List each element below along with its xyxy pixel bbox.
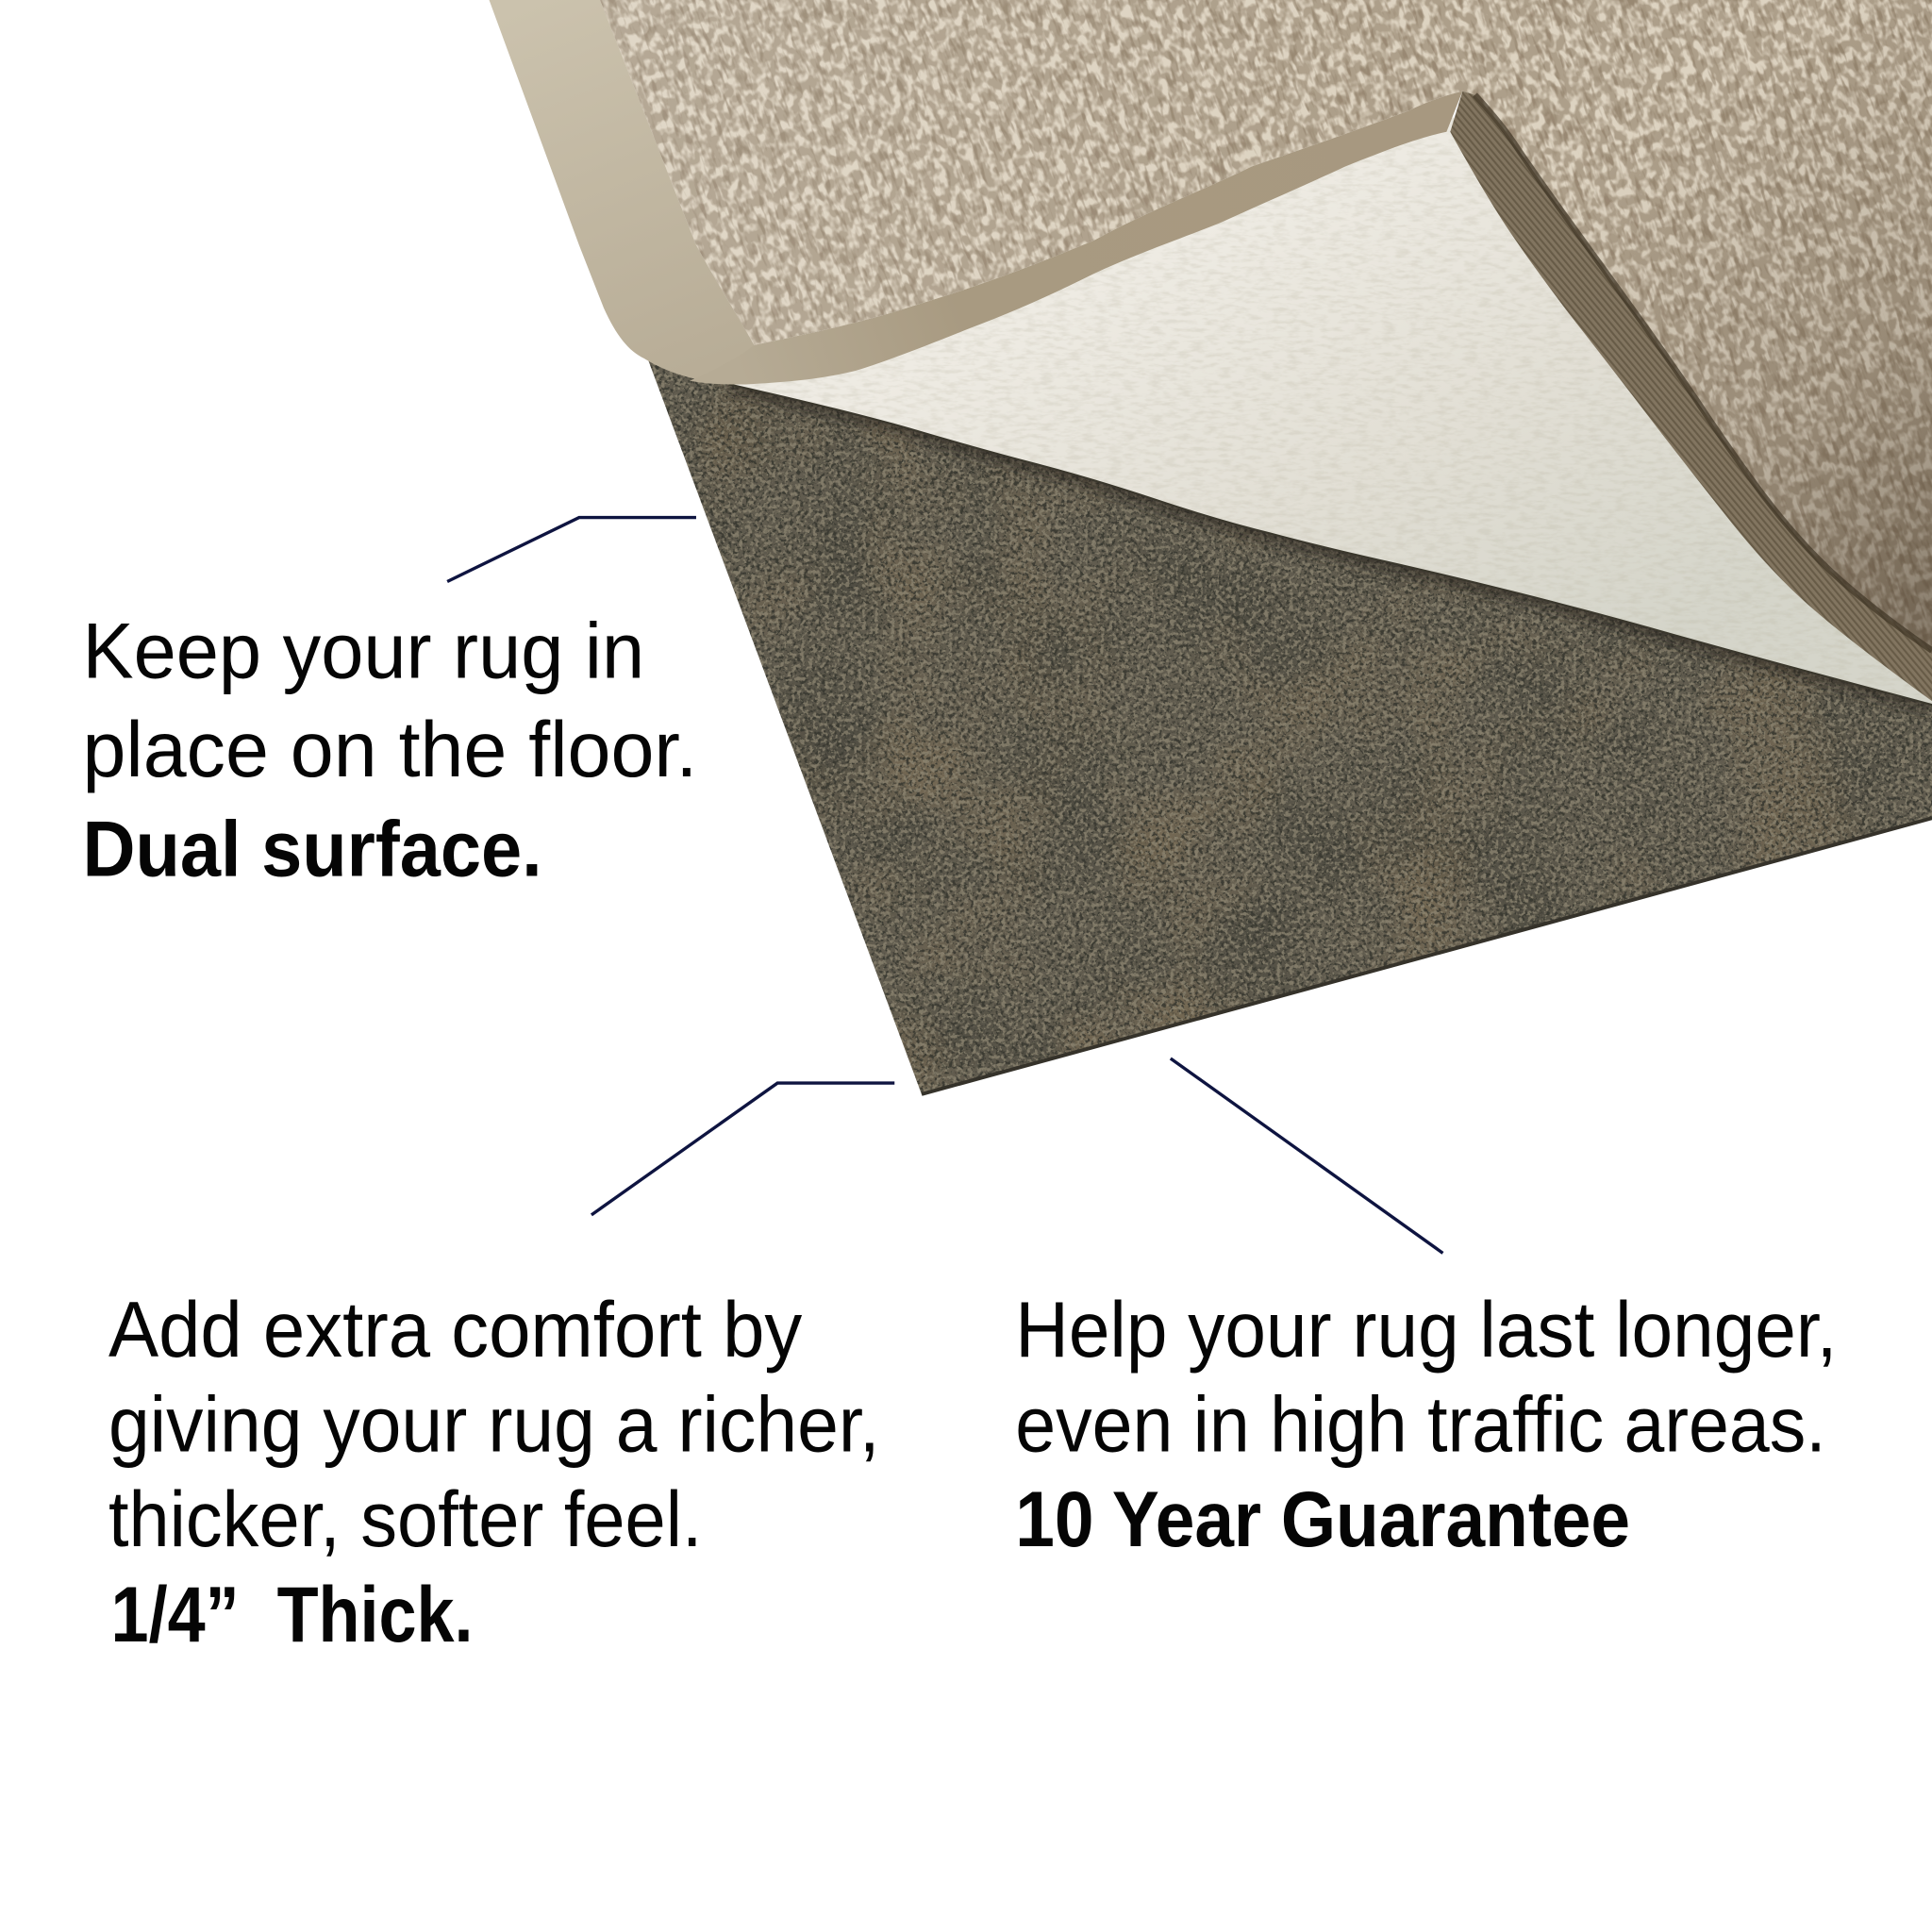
leader line: guarantee: [1171, 1058, 1442, 1253]
text block: extra comfort: 1/4” Thick.: [111, 1570, 474, 1658]
text block: keep rug in place: [83, 606, 697, 893]
text block: extra comfort: giving your rug a richer,: [108, 1380, 880, 1469]
text block: keep rug in place: Keep your rug in: [83, 606, 644, 694]
leader line: dual surface: [447, 518, 696, 581]
text block: keep rug in place: Dual surface.: [83, 805, 542, 893]
rug binding: folded dark side edge: [1450, 92, 1932, 701]
text block: extra comfort: Add extra comfort by: [108, 1285, 802, 1374]
rug pad felt surface: [641, 351, 1932, 1103]
text block: rug longevity: even in high traffic areas.: [1015, 1380, 1826, 1469]
text block: extra comfort: [108, 1285, 880, 1658]
text block: rug longevity: 10 Year Guarantee: [1015, 1474, 1630, 1563]
text block: rug longevity: [1015, 1285, 1837, 1563]
text block: keep rug in place: place on the floor.: [83, 705, 697, 793]
rug binding: left edge band: [490, 0, 789, 385]
rug pad white underside: [727, 111, 1932, 715]
text block: rug longevity: Help your rug last longer,: [1015, 1285, 1837, 1374]
leader line: thickness: [591, 1083, 894, 1215]
photo: rug folded over rug pad: [489, 0, 1932, 1096]
rug binding: folded front edge: [690, 92, 1462, 385]
rug woven carpet surface: [600, 0, 1932, 651]
text block: extra comfort: thicker, softer feel.: [108, 1474, 702, 1563]
